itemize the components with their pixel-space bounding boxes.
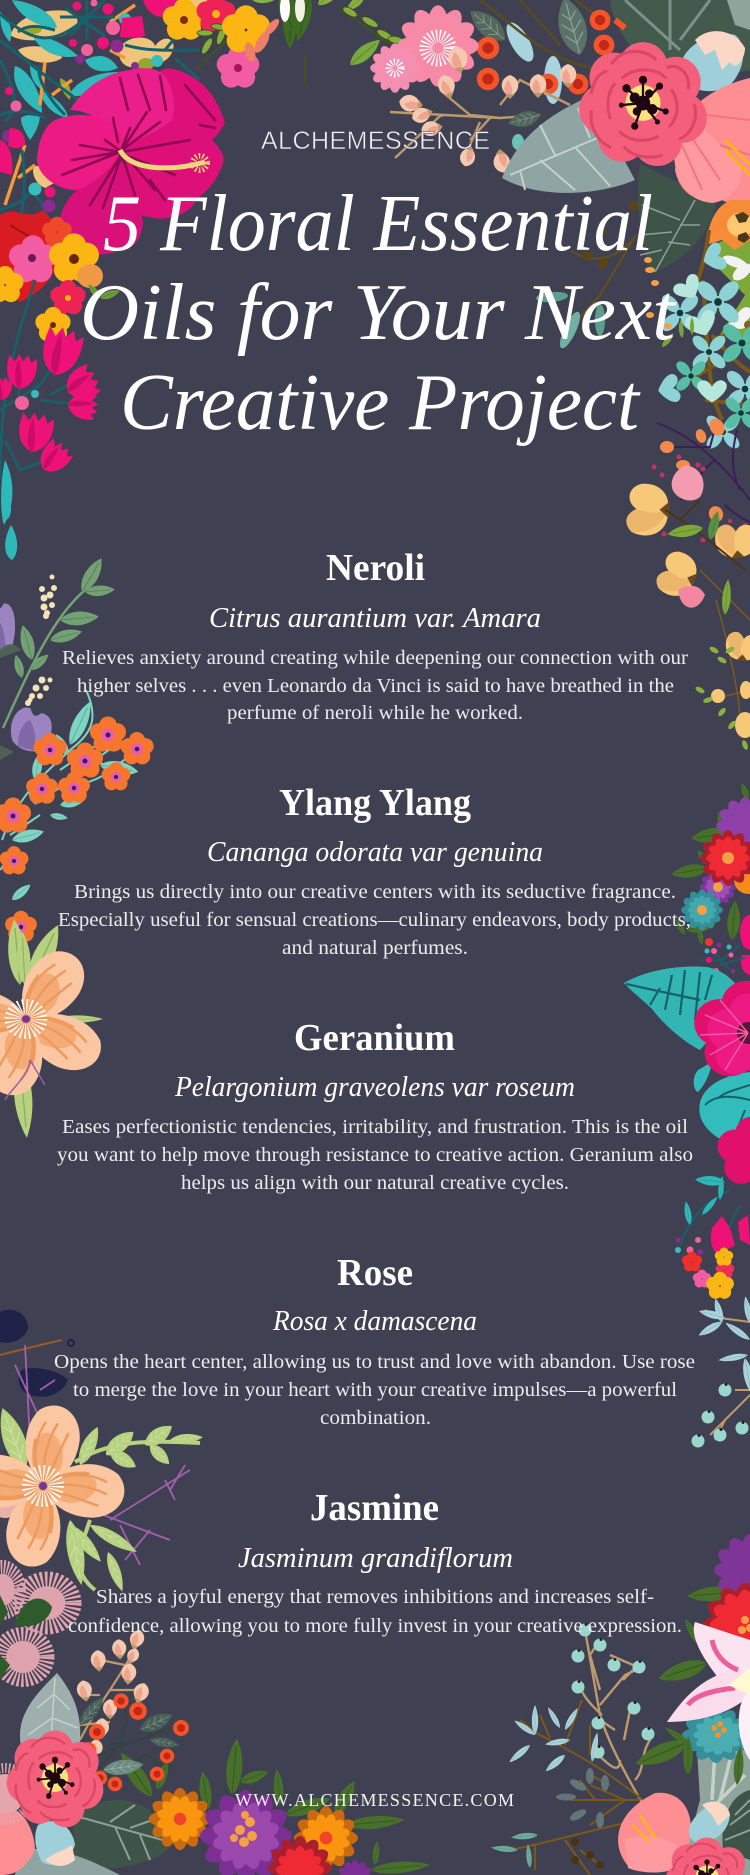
section: Neroli <box>62 547 688 724</box>
green leaves <box>75 1442 200 1590</box>
description: and natural perfumes. <box>282 937 468 959</box>
brand label: ALCHEMESSENCE <box>261 127 490 155</box>
peach flower <box>0 1402 125 1570</box>
dark background leaves <box>610 0 750 80</box>
dark green leaves <box>632 1557 745 1785</box>
magenta buds <box>740 915 750 975</box>
tan buds branch <box>80 1640 139 1740</box>
orange flower 2 <box>294 1806 358 1870</box>
main title <box>80 180 677 447</box>
red flower cluster <box>0 210 61 302</box>
section: Jasmine <box>68 1487 682 1637</box>
orange flower <box>706 200 750 250</box>
purple, red and teal flowers <box>716 797 750 855</box>
peach flower <box>0 942 111 1099</box>
floral cluster: right middle <box>624 782 750 1301</box>
teal mini flowers <box>659 278 750 451</box>
grey leaf <box>20 1673 80 1765</box>
white blossoms <box>721 253 750 329</box>
thin branches behind title <box>560 235 636 340</box>
bottom teal leaves and brown bud cluster <box>510 1820 640 1875</box>
pink rose <box>7 1730 103 1827</box>
grey lower band <box>15 1849 120 1875</box>
main title: 5 Floral Essential <box>103 180 653 268</box>
floral cluster: bottom right <box>491 1534 750 1875</box>
orange dots and olive leaves <box>644 257 672 329</box>
pink rose <box>579 42 707 166</box>
description: combination. <box>320 1407 431 1429</box>
floral cluster: left lower peach flower <box>0 1310 203 1593</box>
purple flower <box>200 1790 292 1875</box>
description: perfume of neroli while he worked. <box>227 702 523 724</box>
pink bud <box>672 465 704 500</box>
description: Especially useful for sensual creations—culinary endeavors, body products, <box>58 909 691 931</box>
description: to merge the love in your heart with your creative impulses—a powerful <box>73 1379 677 1401</box>
description: Eases perfectionistic tendencies, irritability, and frustration. This is the oil <box>62 1116 688 1138</box>
green foliage <box>710 225 750 345</box>
description: you want to help move through resistance to creative action. Geranium also <box>57 1144 693 1166</box>
orange flowers <box>88 716 128 755</box>
blue bud <box>35 1821 75 1866</box>
green leaves <box>115 1748 172 1802</box>
pink rose <box>665 1838 749 1875</box>
floral cluster: top right <box>346 0 750 570</box>
description: confidence, allowing you to more fully invest in your creative expression. <box>68 1615 682 1637</box>
website footer: WWW.ALCHEMESSENCE.COM <box>235 1790 514 1810</box>
grey big leaf <box>502 96 635 193</box>
teal flower <box>682 1707 750 1763</box>
description: helps us align with our natural creative cycles. <box>181 1172 569 1194</box>
heading: Neroli <box>326 547 425 589</box>
dark branch and small leaves <box>85 1710 170 1785</box>
section: Ylang Ylang <box>58 782 691 959</box>
pink lily <box>667 1622 750 1760</box>
top flowers <box>160 0 208 44</box>
floral branch: left middle <box>0 555 156 945</box>
description <box>54 1351 695 1429</box>
section: Geranium <box>57 1017 693 1194</box>
floral cluster: top left <box>0 0 404 560</box>
floral cluster: left peach flower <box>0 918 111 1138</box>
heading: Ylang Ylang <box>279 782 471 824</box>
description: Brings us directly into our creative centers with its seductive fragrance. <box>74 881 676 903</box>
pink pompom flowers <box>0 1569 71 1680</box>
pink berries <box>652 454 747 542</box>
orange flower <box>149 1788 211 1850</box>
navy flowers <box>0 1310 28 1343</box>
section: Rose <box>54 1252 695 1429</box>
description <box>58 881 691 959</box>
latin name: Jasminum grandiflorum <box>238 1543 513 1574</box>
description <box>57 1116 693 1194</box>
teal lower leaves <box>1 460 17 560</box>
salmon flower <box>618 1793 691 1873</box>
bottom teal sprig <box>680 1190 740 1285</box>
blue bud <box>682 31 745 91</box>
purple twigs <box>657 423 750 522</box>
heading: Rose <box>337 1252 413 1294</box>
magenta blooms <box>0 0 187 175</box>
blue bud <box>689 1802 730 1843</box>
orange buds <box>660 416 728 524</box>
cream back petals <box>10 0 213 188</box>
pink tulip branch <box>0 280 81 480</box>
floral branch: right blue leaves <box>692 1296 750 1448</box>
teal leaves <box>0 0 118 140</box>
pale heart buds <box>671 272 727 402</box>
description: higher selves . . . even Leonardo da Vinci is said to have breathed in the <box>77 675 674 697</box>
salmon flower <box>674 78 750 203</box>
top greenery <box>274 0 316 49</box>
brown branches <box>685 230 750 420</box>
berries <box>2 0 163 212</box>
cream flowers <box>626 483 670 536</box>
green leaves <box>197 1738 430 1875</box>
purple twigs <box>15 1345 190 1565</box>
latin name: Rosa x damascena <box>272 1306 477 1337</box>
cream bud clusters <box>25 574 57 706</box>
olive leaf tints <box>25 26 154 100</box>
red flower <box>268 1836 332 1875</box>
heading: Geranium <box>294 1017 455 1059</box>
brown branch with blue leaves <box>520 1700 655 1810</box>
floral cluster: right cream flowers <box>653 547 750 751</box>
grey branch <box>570 1775 640 1825</box>
latin name: Cananga odorata var genuina <box>207 837 543 868</box>
dark leaf <box>722 1790 750 1860</box>
main title: Oils for Your Next <box>80 269 677 357</box>
green sprig <box>3 590 85 728</box>
orange twigs <box>5 5 135 205</box>
tan branch with mint berries <box>578 1630 670 1850</box>
teal lower leaf <box>694 1062 750 1145</box>
green leaves <box>667 522 704 540</box>
pink back petal <box>0 1462 27 1518</box>
salmon flower <box>0 1808 35 1875</box>
green leaves <box>5 918 103 1138</box>
mint stems <box>0 690 136 870</box>
purple flowers <box>0 601 15 652</box>
tan buds branch <box>390 80 570 158</box>
heading: Jasmine <box>310 1487 439 1529</box>
description <box>62 647 688 724</box>
pink chrysanthemums <box>397 5 479 87</box>
latin name: Pelargonium graveolens var roseum <box>174 1072 575 1103</box>
description: Shares a joyful energy that removes inhibitions and increases self- <box>96 1586 654 1608</box>
main title: Creative Project <box>120 359 641 447</box>
dark green leaves <box>670 782 750 945</box>
latin name: Citrus aurantium var. Amara <box>209 603 541 634</box>
dark big leaf <box>638 164 716 273</box>
pink pompom beside rose <box>0 1774 25 1814</box>
hibiscus flower <box>37 68 225 255</box>
floral cluster: bottom left <box>0 1628 430 1875</box>
magenta flowers <box>688 981 750 1086</box>
dark bottom leaf <box>70 1800 175 1869</box>
orange berries <box>477 37 499 59</box>
description <box>68 1586 682 1637</box>
teal big leaf <box>624 966 745 1050</box>
teal stems <box>0 0 200 250</box>
berries <box>700 945 745 975</box>
orange berries <box>113 1693 129 1709</box>
green grey base <box>680 1745 750 1875</box>
description: Relieves anxiety around creating while deepening our connection with our <box>62 647 688 669</box>
description: Opens the heart center, allowing us to trust and love with abandon. Use rose <box>54 1351 695 1373</box>
purple and red flowers <box>714 1534 750 1606</box>
